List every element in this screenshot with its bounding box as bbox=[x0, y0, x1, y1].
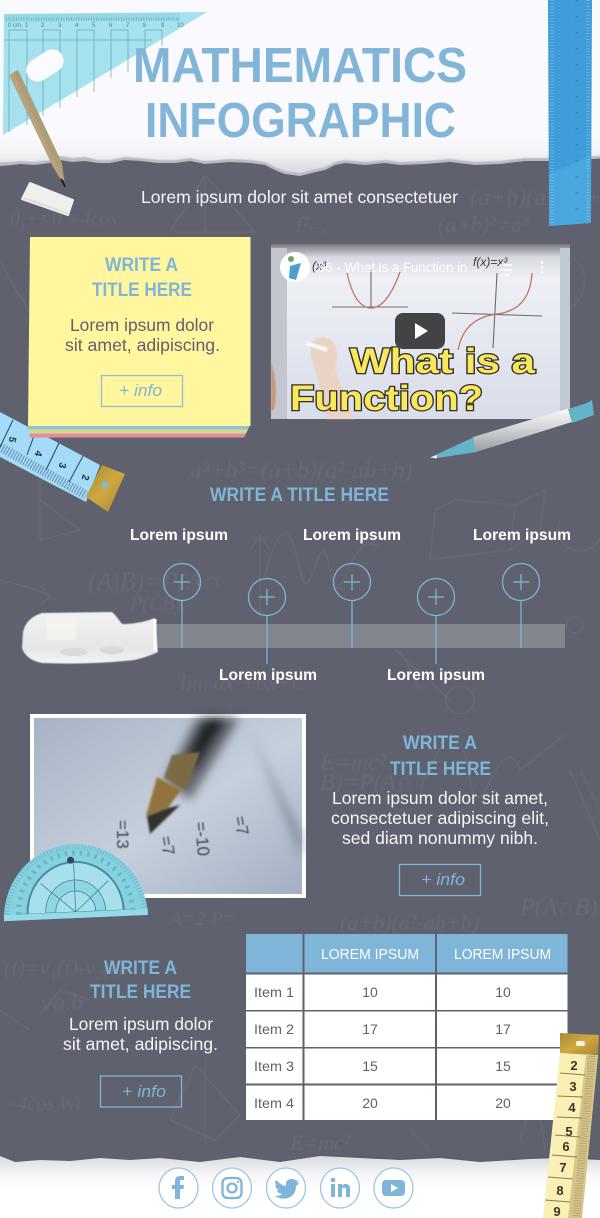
tape numbers: 8 bbox=[556, 1183, 564, 1198]
tape numbers: 5 bbox=[565, 1124, 573, 1139]
background math formulas pattern: (a+b)(a²-ab+b) bbox=[340, 910, 479, 935]
table row 2 bbox=[246, 1012, 568, 1047]
background math formulas pattern: lim ax²+6x+C bbox=[180, 670, 306, 695]
ruler numbers: 6 bbox=[109, 23, 113, 29]
body copy: consectetuer adipiscing elit, bbox=[331, 808, 549, 828]
timeline bar bbox=[156, 624, 565, 648]
section text: write a title, left: TITLE HERE bbox=[90, 982, 191, 1003]
handwritten equations on paper: =7 bbox=[156, 834, 178, 857]
pen tip bbox=[146, 752, 200, 834]
table row 1 bbox=[246, 974, 568, 1010]
icon: blue set square bbox=[3, 12, 207, 135]
video thumbnail caption bbox=[290, 342, 536, 418]
note top sheet bbox=[28, 237, 250, 426]
video thumbnail caption: What is a bbox=[350, 342, 536, 381]
background math formulas pattern: (a+b)²=a² bbox=[438, 212, 529, 237]
table row 4: 20 bbox=[362, 1095, 378, 1111]
background math formulas pattern: P(A∩B) bbox=[519, 895, 597, 921]
table header: LOREM IPSUM bbox=[321, 946, 419, 963]
tape numbers: 2 bbox=[570, 1058, 578, 1073]
table header: LOREM IPSUM bbox=[454, 946, 551, 963]
button bbox=[400, 864, 480, 896]
tape numbers: 7 bbox=[559, 1160, 567, 1175]
button: + info bbox=[122, 1082, 166, 1101]
background math formulas pattern: P(CB) bbox=[129, 593, 181, 615]
table row 2: Item 2 bbox=[254, 1021, 294, 1037]
icon: facebook bbox=[159, 1168, 198, 1208]
timeline item 2 bbox=[219, 578, 317, 684]
panel: yellow sticky note bbox=[28, 237, 250, 438]
note button: + info bbox=[119, 381, 162, 400]
ruler numbers: 8 bbox=[143, 23, 147, 29]
note stack stripes bbox=[28, 425, 250, 430]
top torn paper header bbox=[0, 0, 600, 176]
tape numbers: 4 bbox=[32, 449, 44, 458]
table row 2: 17 bbox=[362, 1021, 378, 1037]
section text: write a title, right bbox=[331, 733, 549, 896]
button bbox=[100, 1076, 182, 1107]
ruler numbers bbox=[8, 23, 184, 29]
note body: sit amet, adipiscing. bbox=[65, 335, 220, 355]
table row 4: 20 bbox=[495, 1095, 511, 1111]
ruler numbers: 5 bbox=[92, 23, 96, 29]
menu dots bbox=[541, 262, 543, 273]
photo: pen on math paper bbox=[30, 714, 306, 898]
blurred pen bbox=[165, 718, 302, 860]
section text: write a title, right: WRITE A bbox=[403, 733, 477, 754]
body copy: sit amet, adipiscing. bbox=[63, 1034, 218, 1054]
tape measure tip bbox=[86, 465, 125, 512]
graph: parabola bbox=[332, 270, 408, 308]
title: INFOGRAPHIC bbox=[145, 94, 456, 148]
tape numbers: 6 bbox=[562, 1139, 570, 1154]
button: + info bbox=[421, 870, 465, 889]
title: MATHEMATICS bbox=[133, 39, 467, 93]
icon: eraser bbox=[22, 183, 73, 215]
video thumbnail bbox=[271, 243, 570, 419]
hand with marker bbox=[271, 337, 355, 419]
video thumbnail caption: Function? bbox=[290, 379, 483, 418]
timeline item 3: Lorem ipsum bbox=[303, 527, 401, 544]
background math formulas pattern: (t)=v₁(t)-v₂(t) bbox=[4, 955, 123, 980]
section text: write a title, right: TITLE HERE bbox=[390, 759, 491, 780]
ruler numbers: 0 cm bbox=[8, 23, 21, 29]
graph: cubic bbox=[452, 273, 542, 348]
ruler numbers: 2 bbox=[41, 23, 45, 29]
tape numbers: 3 bbox=[56, 461, 68, 470]
video title: 06 - What is a Function in ... bbox=[318, 260, 482, 275]
background math formulas pattern: E=mc² bbox=[289, 1130, 351, 1155]
oval hole bbox=[22, 45, 68, 86]
table row 3: 15 bbox=[362, 1058, 378, 1074]
data table bbox=[246, 934, 568, 1120]
body copy: Lorem ipsum dolor sit amet, bbox=[332, 788, 548, 808]
icon: pen bbox=[430, 400, 594, 458]
background math formulas pattern: A=2,P= bbox=[168, 908, 236, 930]
table row 3: 15 bbox=[495, 1058, 511, 1074]
tape numbers: 2 bbox=[79, 473, 91, 482]
note stack middle stripe bbox=[29, 430, 248, 434]
channel avatar bbox=[280, 252, 310, 282]
timeline item 1 bbox=[130, 527, 228, 648]
timeline section heading: WRITE A TITLE HERE bbox=[210, 485, 389, 506]
table row 1: 10 bbox=[495, 984, 511, 1000]
body copy: Lorem ipsum dolor bbox=[69, 1014, 213, 1034]
play button bbox=[395, 313, 445, 349]
icon: yellow measuring tape bbox=[543, 1033, 599, 1218]
tape numbers: 4 bbox=[568, 1100, 576, 1115]
note heading bbox=[92, 255, 192, 301]
ruler numbers: 9 bbox=[161, 23, 165, 29]
table row 4 bbox=[246, 1086, 568, 1120]
section text: write a title, left bbox=[63, 958, 218, 1107]
table row 2: 17 bbox=[495, 1021, 511, 1037]
background math formulas pattern: =4cos Wt bbox=[4, 1093, 82, 1115]
handwritten equations on paper: =-10 bbox=[191, 821, 213, 857]
note heading: WRITE A bbox=[105, 255, 178, 276]
background math formulas pattern: √a.b bbox=[40, 990, 83, 1016]
graph labels bbox=[312, 255, 508, 273]
title bbox=[133, 39, 467, 148]
tape numbers: 3 bbox=[569, 1079, 577, 1094]
background math formulas pattern: B)=P(A∩ bbox=[320, 770, 414, 796]
body copy bbox=[331, 788, 549, 848]
table row 4: Item 4 bbox=[254, 1095, 294, 1111]
icon: instagram bbox=[212, 1168, 252, 1208]
tape numbers bbox=[6, 435, 91, 482]
table row 3 bbox=[246, 1048, 568, 1084]
background math formulas pattern: a³+b³=(a+b)(a²-ab+b) bbox=[190, 458, 412, 484]
ruler numbers: 7 bbox=[126, 23, 130, 29]
handwritten equations on paper: =13 bbox=[113, 820, 132, 849]
timeline item 3 bbox=[303, 527, 401, 648]
note stack edges bbox=[28, 425, 250, 438]
timeline item 4 bbox=[387, 578, 485, 684]
timeline item 2: Lorem ipsum bbox=[219, 667, 317, 684]
note button bbox=[102, 376, 182, 406]
background math formulas pattern: E=mc² bbox=[319, 750, 387, 776]
timeline item 1: Lorem ipsum bbox=[130, 527, 228, 544]
icon: protractor bbox=[1, 841, 148, 921]
ruler numbers: 1 bbox=[25, 23, 29, 29]
icon: blue ruler bbox=[548, 0, 592, 226]
section text: write a title, left: WRITE A bbox=[104, 958, 177, 979]
timeline item 4: Lorem ipsum bbox=[387, 667, 485, 684]
timeline item 5: Lorem ipsum bbox=[473, 527, 571, 544]
ruler numbers: 3 bbox=[58, 23, 62, 29]
table header bbox=[246, 934, 568, 972]
note body: Lorem ipsum dolor bbox=[70, 315, 214, 335]
background math formulas pattern: x²= bbox=[499, 623, 528, 645]
graph labels: f(x)=x³ bbox=[473, 255, 508, 269]
icon: twitter bbox=[266, 1168, 306, 1208]
background math formulas pattern bbox=[4, 185, 600, 1155]
table row 1: Item 1 bbox=[254, 984, 294, 1000]
table row 3: Item 3 bbox=[254, 1058, 294, 1074]
ruler numbers: 4 bbox=[75, 23, 79, 29]
graph labels: (x³ bbox=[312, 259, 327, 273]
subtitle: Lorem ipsum dolor sit amet consectetuer bbox=[141, 187, 458, 207]
playlist icon bbox=[500, 265, 512, 275]
icon: youtube bbox=[374, 1168, 413, 1208]
bottom torn paper footer bbox=[0, 1156, 600, 1218]
background math formulas pattern: F₋₁ bbox=[294, 212, 328, 237]
handwritten equations on paper: =7 bbox=[230, 814, 252, 837]
icon: measuring tape bbox=[0, 412, 125, 512]
table row 1: 10 bbox=[362, 984, 378, 1000]
timeline item 5 bbox=[473, 527, 571, 648]
background math formulas pattern: (A|B)=P(A∩ bbox=[88, 567, 221, 596]
note heading: TITLE HERE bbox=[92, 280, 192, 301]
handwritten equations on paper bbox=[113, 814, 252, 857]
icon: pencil bbox=[9, 70, 65, 187]
social icons bbox=[159, 1168, 413, 1208]
tape numbers: 5 bbox=[6, 435, 18, 444]
background math formulas pattern: 0,+<0 =4cos bbox=[10, 208, 117, 230]
body copy: sed diam nonummy nibh. bbox=[342, 828, 538, 848]
note body bbox=[65, 315, 220, 355]
icon: tape dispenser bbox=[22, 612, 158, 664]
ruler numbers: 10 bbox=[177, 23, 184, 29]
icon: linkedin bbox=[320, 1168, 360, 1208]
body copy bbox=[63, 1014, 218, 1054]
timeline bbox=[130, 527, 571, 684]
tape numbers bbox=[553, 1058, 578, 1218]
